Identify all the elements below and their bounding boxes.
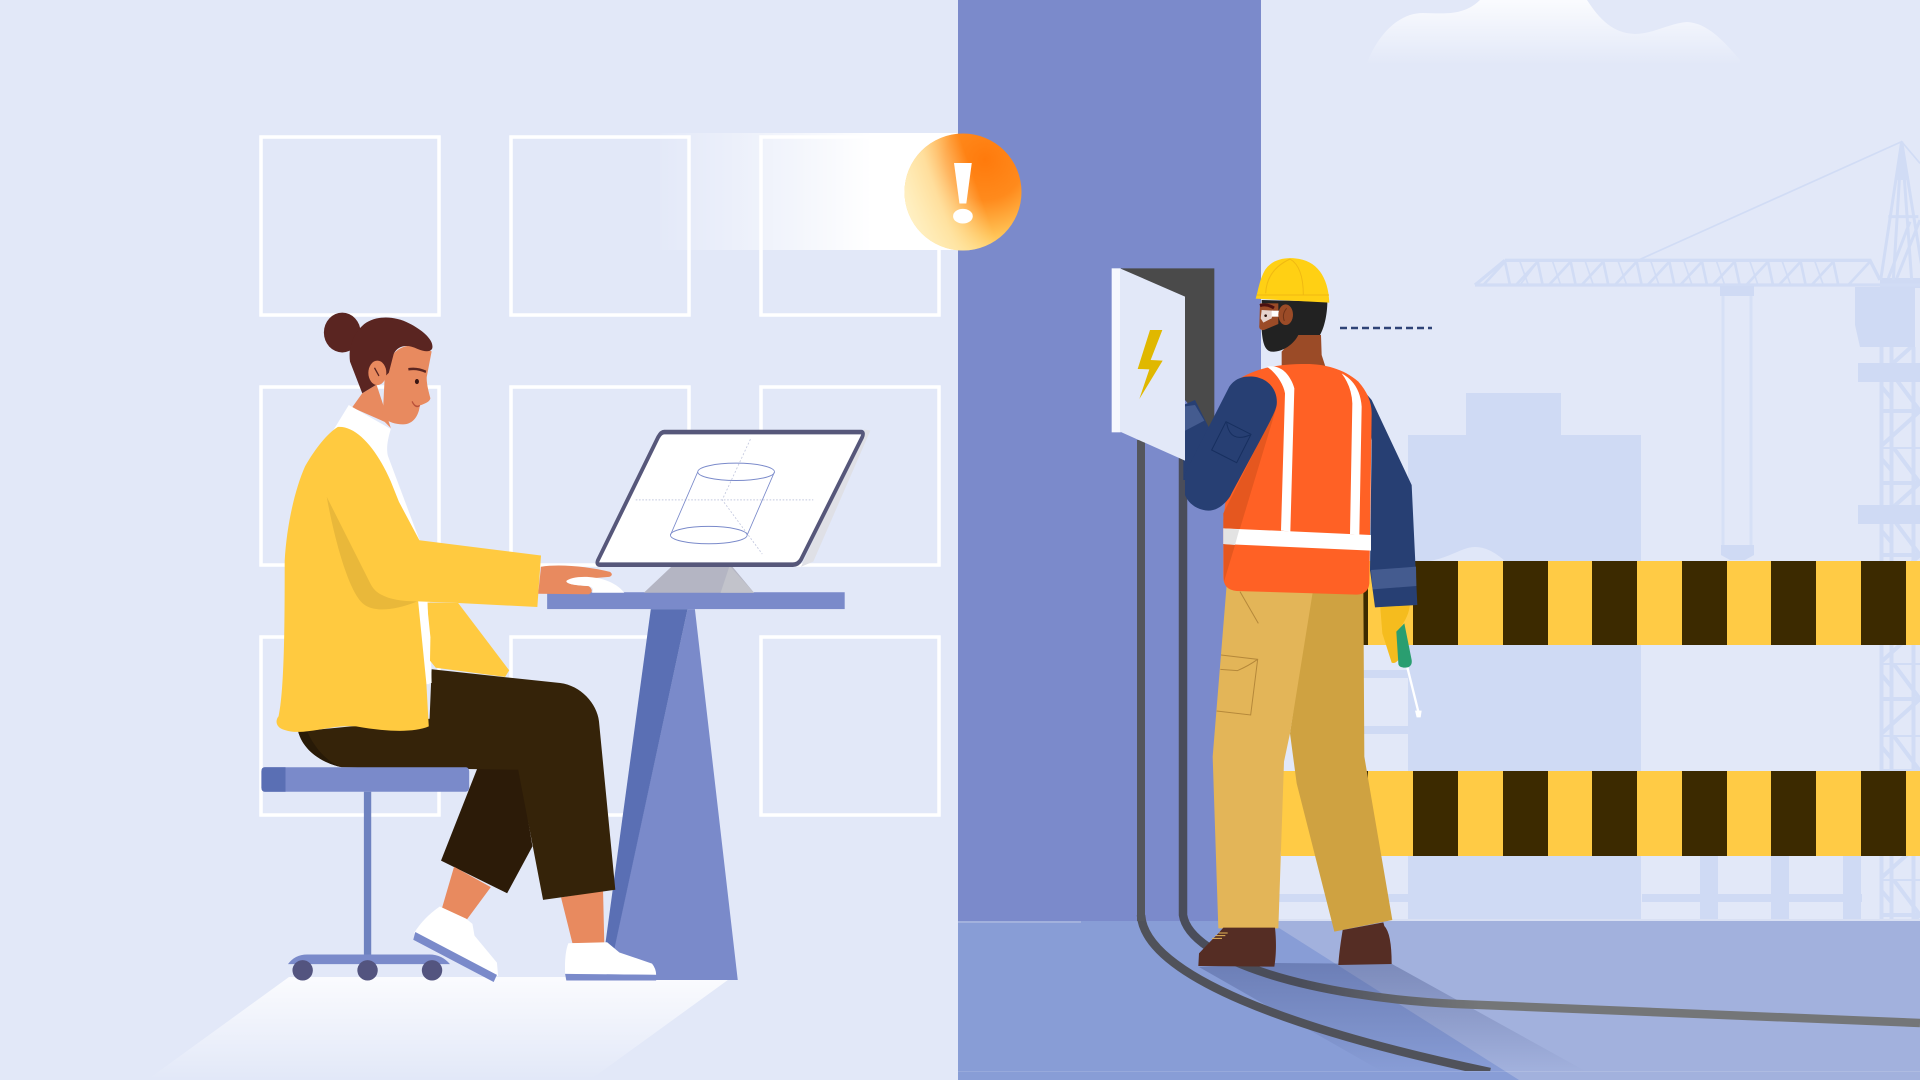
hair bun bbox=[324, 313, 361, 352]
floor glow under desk bbox=[147, 977, 732, 1080]
crane jib bbox=[1475, 140, 1920, 285]
glove bbox=[1380, 603, 1410, 663]
cabinet door bbox=[1120, 268, 1185, 461]
woman designer seated bbox=[261, 313, 870, 982]
lightning bolt icon bbox=[1138, 330, 1163, 399]
dashed line callout bbox=[1340, 327, 1432, 329]
mouse bbox=[566, 577, 624, 593]
background building bbox=[1408, 393, 1641, 921]
face bbox=[383, 346, 432, 424]
scaffold structures bbox=[1275, 670, 1862, 922]
blue central column bbox=[958, 0, 1261, 925]
monitor shadow bbox=[801, 429, 870, 567]
rear sleeve bbox=[1358, 384, 1417, 607]
stool bbox=[261, 767, 469, 981]
face details bbox=[408, 369, 426, 406]
hair bbox=[350, 318, 432, 393]
back leg bbox=[441, 767, 532, 893]
forearm cuff bbox=[1183, 405, 1204, 432]
cad cylinder drawing bbox=[636, 439, 813, 554]
face bbox=[1259, 303, 1278, 330]
desk leg bbox=[605, 609, 738, 980]
vest reflective straps bbox=[1223, 366, 1371, 551]
electrical cable left upper bbox=[1137, 440, 1145, 921]
crane tower lattice bbox=[1880, 347, 1920, 921]
front shoe bbox=[565, 942, 656, 981]
wireframe grid of white squares bbox=[261, 137, 939, 815]
vest strap shaded bbox=[1223, 528, 1239, 545]
neck bbox=[352, 385, 391, 428]
jacket arm shadow bbox=[327, 497, 417, 609]
monitor stand bbox=[644, 566, 754, 593]
ear bbox=[368, 361, 386, 385]
front boot bbox=[1198, 928, 1276, 967]
alert icon: ! bbox=[943, 143, 983, 242]
jacket lower right panel bbox=[428, 602, 509, 677]
rear cuff bbox=[1371, 567, 1416, 589]
rear boot bbox=[1338, 922, 1392, 965]
construction crane bbox=[1475, 140, 1920, 921]
front sleeve bbox=[1185, 377, 1277, 511]
head hair and beard bbox=[1262, 300, 1327, 352]
shirt strip bbox=[417, 601, 430, 684]
cargo pocket bbox=[1217, 592, 1258, 715]
small cloud behind barrier bbox=[1429, 547, 1505, 561]
trousers bbox=[298, 669, 615, 900]
back shoe bbox=[413, 907, 498, 982]
striped barrier bottom bbox=[1281, 771, 1920, 856]
shirt collar bbox=[332, 405, 432, 683]
cabinet interior bbox=[1121, 268, 1214, 428]
screwdriver handle bbox=[1396, 623, 1412, 668]
crane platforms and counterweight bbox=[1855, 278, 1920, 524]
desk top bbox=[547, 592, 845, 609]
electrical cable left bbox=[1141, 915, 1490, 1072]
sleeve pocket bbox=[1212, 422, 1251, 463]
worker upper body bbox=[1112, 258, 1417, 607]
safety vest bbox=[1223, 364, 1372, 595]
floor bbox=[958, 919, 1920, 1080]
vest shadow bbox=[1223, 407, 1277, 582]
worker foot shadow bbox=[1199, 963, 1587, 1072]
forearm reaching cabinet bbox=[1183, 400, 1209, 480]
electrical cable right bbox=[1183, 440, 1920, 1023]
ear bbox=[1278, 304, 1293, 325]
rear trouser leg bbox=[1290, 587, 1392, 932]
hand bbox=[538, 566, 612, 594]
cabinet door edge bbox=[1112, 268, 1121, 432]
monitor bbox=[597, 432, 863, 565]
screwdriver shaft bbox=[1407, 667, 1422, 717]
jacket body and arm bbox=[277, 427, 541, 732]
crane hook bbox=[1720, 286, 1754, 560]
worker legs bbox=[1198, 585, 1422, 967]
striped barrier top bbox=[1281, 561, 1920, 645]
background cloud bbox=[1367, 0, 1740, 83]
electrical cabinet bbox=[1121, 268, 1214, 428]
back shin bbox=[442, 867, 491, 920]
front trouser leg bbox=[1213, 585, 1313, 928]
alert icon bbox=[904, 134, 1022, 250]
alert glow strip bbox=[660, 133, 963, 250]
neck bbox=[1282, 335, 1326, 368]
front shin bbox=[561, 891, 604, 943]
hard hat bbox=[1256, 258, 1329, 303]
safety glasses bbox=[1260, 305, 1280, 323]
